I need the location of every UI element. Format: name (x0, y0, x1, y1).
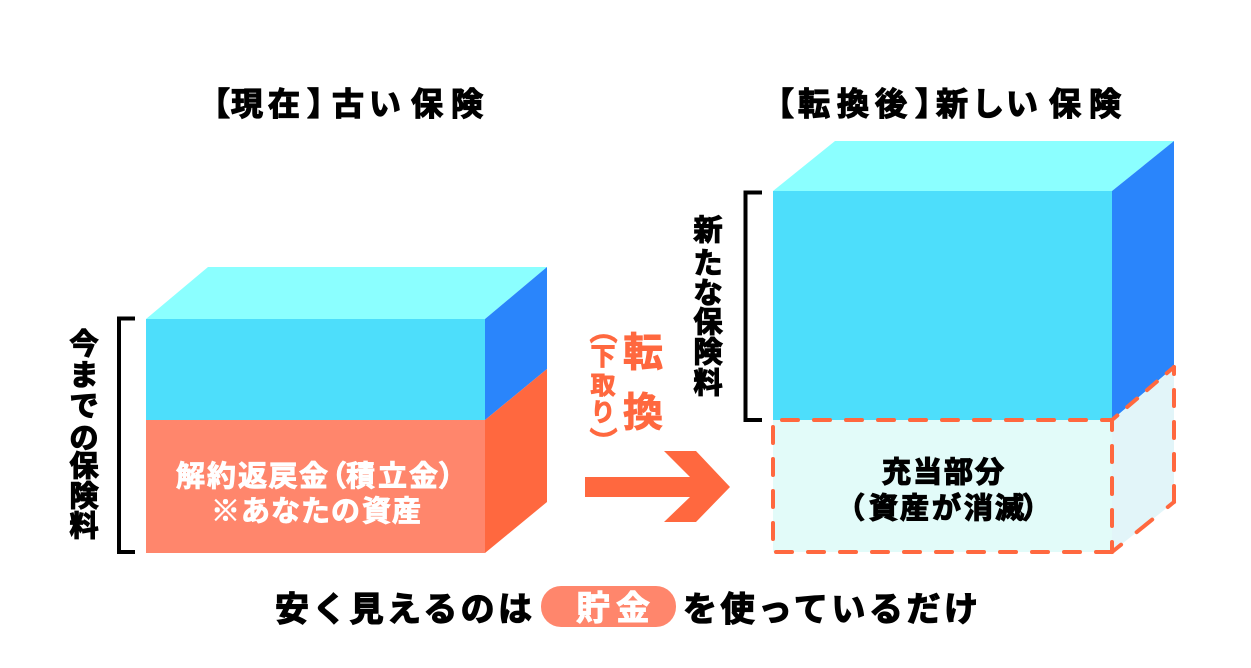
label: premiums so far: 保 (69, 450, 99, 483)
label: premiums so far: の (69, 423, 99, 455)
bottom message: right part: を使っているだけ (683, 591, 978, 629)
top face (146, 267, 547, 319)
label: your assets: ※あなたの資産 (211, 495, 421, 528)
panel: old insurance block (146, 267, 547, 553)
label: conversion (623, 331, 663, 435)
label: surrender value: 解約返戻金（積立金） (176, 460, 467, 493)
pill: savings: 貯金 (576, 590, 650, 628)
label: assets disappear: （資産が消滅） (836, 491, 1051, 525)
label: trade-in: ） (587, 427, 618, 455)
savings side face (485, 369, 547, 553)
savings front face (146, 420, 485, 553)
label: new premium: た (693, 248, 723, 280)
heading: current old insurance: 【現在】古い保険 (198, 86, 483, 122)
side face (1112, 141, 1174, 420)
label: premiums so far: で (69, 391, 99, 423)
label: new premium: な (693, 278, 723, 310)
offset portion front (773, 420, 1112, 552)
heading: new insurance after conversion: 【転換後】新しい保険 (762, 86, 1121, 122)
label: premiums so far: 料 (69, 510, 99, 543)
label: trade-in: 取 (590, 372, 616, 400)
label: premiums so far: 今 (69, 328, 99, 361)
label: offset portion: 充当部分 (882, 456, 1004, 489)
dashed outline (773, 367, 1174, 552)
top face (773, 141, 1174, 191)
label: premiums so far: ま (69, 360, 99, 392)
offset portion side (1112, 367, 1174, 552)
bottom message: left part: 安く見えるのは (275, 591, 532, 629)
pill: savings (541, 586, 676, 628)
label: trade-in: り (590, 399, 616, 427)
front face (773, 191, 1112, 420)
arrow (585, 451, 730, 522)
label: trade-in: 下 (590, 343, 616, 371)
bracket: premiums so far (119, 318, 135, 552)
premium side face (485, 267, 547, 420)
label: new premium: 料 (693, 367, 723, 400)
label: new premium (693, 214, 723, 400)
label: conversion: 換 (623, 391, 663, 435)
label: new premium: 保 (693, 306, 723, 339)
premium front face (146, 319, 485, 420)
label: trade-in (587, 316, 618, 455)
label: premiums so far (69, 328, 99, 543)
label: trade-in: （ (587, 316, 618, 344)
label: premiums so far: 険 (69, 480, 99, 513)
label: new premium: 険 (693, 336, 723, 369)
label: new premium: 新 (693, 214, 723, 247)
panel: new insurance block (773, 141, 1174, 552)
bracket: new premium (746, 192, 762, 420)
label: conversion: 転 (623, 331, 663, 375)
